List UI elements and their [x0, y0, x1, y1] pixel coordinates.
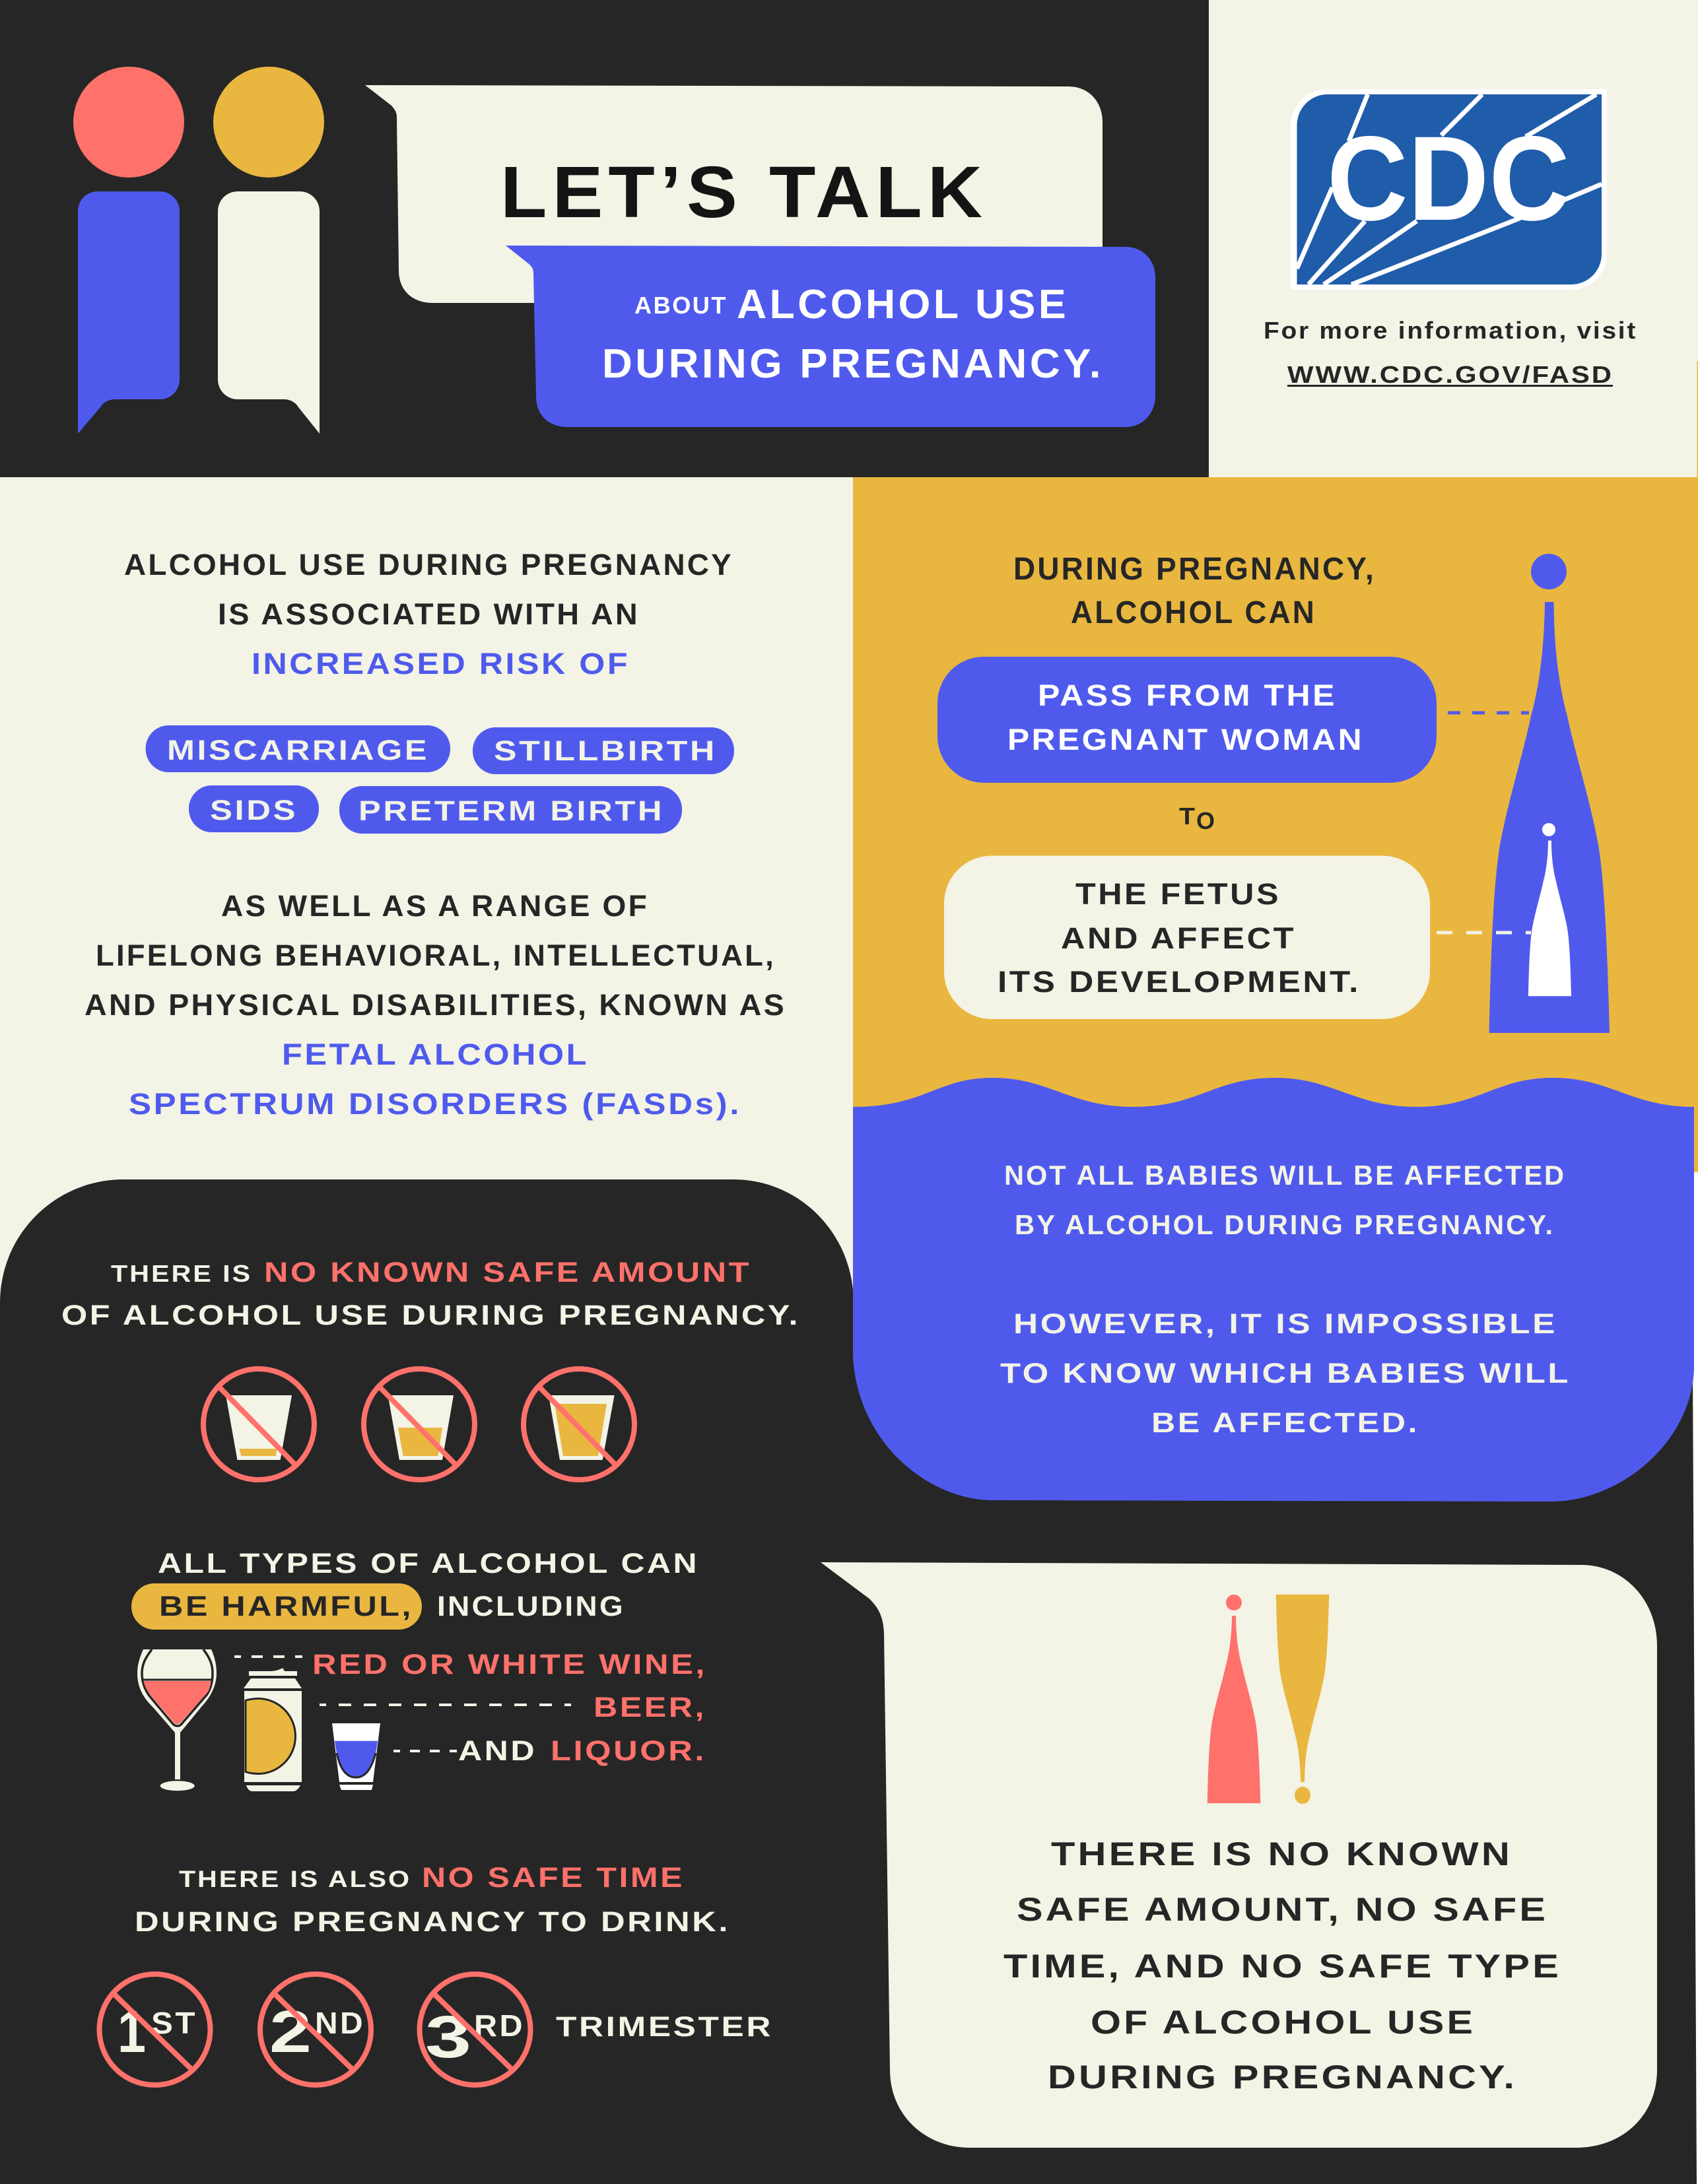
text: heading [1013, 552, 1376, 630]
icon: no second trimester: ND [315, 2006, 365, 2040]
icon: no second trimester [260, 1974, 371, 2085]
text: risk intro: IS ASSOCIATED WITH AN [218, 597, 640, 631]
callout: pass from the pregnant woman [937, 657, 1437, 783]
speech bubble: title [365, 85, 1103, 303]
connector: blue dashes [1448, 711, 1529, 714]
icon: no first trimester [99, 1974, 210, 2085]
icon: crossed-out glass full [524, 1369, 634, 1480]
callout: the fetus and affect its development [944, 855, 1430, 1019]
tag: miscarriage [146, 725, 450, 772]
callout: pass from the pregnant woman: PASS FROM THE [1038, 678, 1337, 712]
speech bubble: subtitle: ABOUT [634, 292, 728, 319]
text: FASD description: FETAL ALCOHOL [282, 1038, 589, 1071]
text: all types of alcohol: BE HARMFUL, [159, 1591, 413, 1622]
icon: no third trimester: 3 [425, 2004, 471, 2070]
text: no known safe amount: OF ALCOHOL USE DURING PREGNANCY. [61, 1300, 800, 1331]
text: no known safe amount [61, 1257, 800, 1331]
panel: conclusion speech bubble [821, 1562, 1657, 2148]
text: more information link: For more information, visit [1264, 317, 1637, 344]
text: conclusion: THERE IS NO KNOWN [1051, 1836, 1512, 1872]
text: to: O [1196, 807, 1215, 834]
text: more information link: WWW.CDC.GOV/FASD [1287, 361, 1613, 388]
icon: crossed-out glass small amount [203, 1369, 314, 1480]
text: risk intro [124, 548, 733, 680]
speech bubble: subtitle: ALCOHOL USE [737, 282, 1069, 327]
text: FASD description: SPECTRUM DISORDERS (FASDs). [129, 1087, 741, 1121]
text: impossible to know: BE AFFECTED. [1151, 1407, 1419, 1439]
icon: no third trimester [420, 1974, 531, 2085]
text: no known safe amount: THERE IS [111, 1260, 252, 1287]
connector: cream dashes [1437, 931, 1531, 935]
icon: large bottle with small bottle [1489, 554, 1610, 1033]
text: to [1179, 803, 1215, 834]
text: conclusion: OF ALCOHOL USE [1091, 2004, 1476, 2041]
text: heading: DURING PREGNANCY, [1013, 552, 1376, 587]
text: not all babies [1004, 1160, 1566, 1240]
text: impossible to know: TO KNOW WHICH BABIES WILL [1000, 1358, 1571, 1389]
text: FASD description: AND PHYSICAL DISABILITIES, KNOWN AS [85, 988, 786, 1022]
text: to: T [1179, 803, 1195, 830]
text: conclusion: TIME, AND NO SAFE TYPE [1003, 1948, 1561, 1985]
icon: coral bottle and gold flute [1207, 1595, 1329, 1804]
text: wine beer liquor list: LIQUOR. [551, 1735, 706, 1767]
text: not all babies: NOT ALL BABIES WILL BE AFFECTED [1004, 1160, 1566, 1191]
connector: wine dashes [234, 1655, 302, 1658]
icon: shot glass [332, 1723, 380, 1790]
speech bubble: subtitle: DURING PREGNANCY. [602, 341, 1104, 387]
text: no safe time: THERE IS ALSO [179, 1867, 411, 1892]
text: all types of alcohol: INCLUDING [437, 1591, 625, 1622]
panel: during pregnancy alcohol can [937, 552, 1610, 1033]
icon: no first trimester: ST [151, 2006, 197, 2040]
text: impossible to know [1000, 1308, 1571, 1439]
text: heading: ALCOHOL CAN [1071, 595, 1316, 630]
speech bubble: subtitle [506, 246, 1155, 427]
icon: no second trimester: 2 [269, 1999, 312, 2065]
tag: SIDS: SIDS [210, 795, 298, 826]
callout: the fetus and affect its development: THE FETUS [1075, 877, 1281, 911]
text: no safe time: NO SAFE TIME [422, 1862, 685, 1894]
callout: the fetus and affect its development: ITS DEVELOPMENT. [998, 965, 1361, 999]
tag: SIDS [189, 785, 319, 832]
panel: dark left column [0, 1179, 1697, 2184]
panel: not all babies wave [853, 1078, 1694, 1502]
text: conclusion: SAFE AMOUNT, NO SAFE [1017, 1891, 1548, 1928]
text: no safe time [135, 1862, 730, 1938]
text: risk intro: INCREASED RISK OF [252, 647, 630, 680]
icon: wine glass [137, 1649, 217, 1791]
text: wine beer liquor list: RED OR WHITE WINE, [312, 1649, 707, 1680]
text: trimester: TRIMESTER [556, 2011, 773, 2043]
icon: crossed-out glass half full [364, 1369, 475, 1480]
text: all types of alcohol [131, 1548, 699, 1630]
callout: pass from the pregnant woman: PREGNANT WOMAN [1007, 723, 1364, 756]
text: all types of alcohol: ALL TYPES OF ALCOHOL CAN [158, 1548, 699, 1579]
text: FASD description: LIFELONG BEHAVIORAL, INTELLECTUAL, [96, 939, 776, 972]
panel: increased risk text [85, 548, 786, 1121]
tag: preterm birth [339, 786, 682, 834]
text: more information link [1264, 317, 1637, 388]
connector: liquor dashes [393, 1750, 457, 1752]
text: no known safe amount: NO KNOWN SAFE AMOUNT [264, 1257, 751, 1288]
tag: stillbirth: STILLBIRTH [494, 735, 717, 767]
panel: header [0, 0, 1209, 477]
logo: CDC [1291, 89, 1607, 290]
icon: two people speech figures [73, 67, 324, 434]
text: impossible to know: HOWEVER, IT IS IMPOSSIBLE [1013, 1308, 1557, 1340]
panel: gold background [853, 477, 1698, 1172]
text: wine beer liquor list: AND [458, 1735, 537, 1767]
text: wine beer liquor list [312, 1649, 707, 1767]
callout: the fetus and affect its development: AND AFFECT [1061, 921, 1296, 955]
text: conclusion [1003, 1836, 1561, 2096]
text: no safe time: DURING PREGNANCY TO DRINK. [135, 1906, 730, 1938]
text: risk intro: ALCOHOL USE DURING PREGNANCY [124, 548, 733, 581]
icon: beer can [244, 1668, 302, 1791]
tag: miscarriage: MISCARRIAGE [167, 735, 429, 766]
icon: no first trimester: 1 [118, 1999, 146, 2065]
tag: stillbirth [473, 727, 734, 774]
text: FASD description: AS WELL AS A RANGE OF [221, 889, 649, 923]
tag: preterm birth: PRETERM BIRTH [358, 795, 664, 827]
speech bubble: title: LET’S TALK [500, 152, 988, 233]
connector: beer dashes [320, 1704, 571, 1706]
text: FASD description [85, 889, 786, 1121]
text: wine beer liquor list: BEER, [594, 1692, 706, 1723]
logo: CDC: CDC [1327, 111, 1570, 246]
icon: no third trimester: RD [474, 2008, 525, 2043]
text: conclusion: DURING PREGNANCY. [1048, 2059, 1517, 2096]
text: not all babies: BY ALCOHOL DURING PREGNANCY. [1015, 1209, 1555, 1240]
